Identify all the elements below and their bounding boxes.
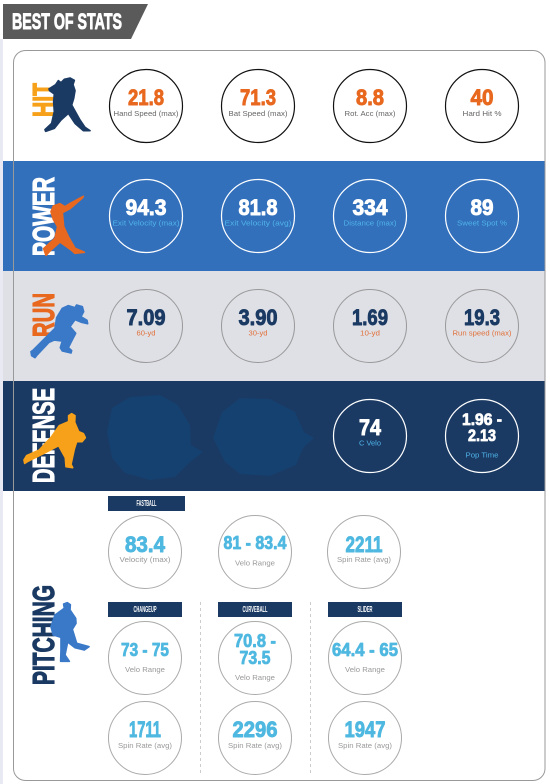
stat: slider spin rate — [328, 702, 402, 774]
stat: 30 yard: 30-yd — [248, 328, 268, 338]
stat: fastball velo range — [218, 516, 292, 588]
stat: distance: Distance (max) — [344, 218, 397, 228]
header: slider — [328, 602, 402, 617]
heading: power: POWER — [27, 177, 61, 256]
stat: rotational acceleration: Rot. Acc (max) — [344, 109, 396, 118]
stat: exit velocity max: 94.3 — [126, 195, 166, 220]
stat: changeup spin rate: 1711 — [129, 717, 161, 742]
stat: sweet spot: Sweet Spot % — [457, 218, 507, 228]
stat: fastball spin rate — [328, 516, 400, 588]
stat: fastball velo range: 81 - 83.4 — [224, 532, 287, 553]
stat: 30 yard: 3.90 — [238, 305, 278, 330]
stat: bat speed — [222, 70, 294, 142]
stat: changeup velo range — [108, 622, 182, 694]
stat: fastball velo range: Velo Range — [235, 558, 275, 568]
panel: defense — [3, 381, 545, 491]
stat: rotational acceleration — [334, 70, 406, 142]
stat: fastball velocity — [108, 516, 182, 588]
stat: changeup velo range: Velo Range — [125, 665, 165, 674]
panel: pitching — [27, 496, 402, 775]
stat: slider velo range: Velo Range — [345, 665, 385, 674]
stat: curveball spin rate: 2296 — [232, 717, 278, 742]
stat: rotational acceleration: 8.8 — [356, 85, 384, 110]
stat: slider spin rate: 1947 — [344, 717, 386, 742]
stat: 10 yard: 1.69 — [352, 305, 388, 330]
stat: fastball spin rate: Spin Rate (avg) — [337, 555, 392, 564]
icon: fielder — [24, 414, 85, 468]
heading: pitching: PITCHING — [27, 585, 61, 685]
stat: curveball spin rate: Spin Rate (avg) — [228, 741, 283, 750]
stat: pop time: Pop Time — [466, 450, 498, 460]
heading: run: RUN — [27, 293, 61, 337]
stat: 60 yard: 60-yd — [136, 328, 156, 338]
stat: changeup spin rate — [108, 702, 182, 774]
title banner — [3, 4, 148, 39]
stat: hard hit — [446, 70, 518, 142]
stat: 10 yard — [334, 290, 406, 362]
stat: hard hit: 40 — [470, 85, 494, 110]
stat: distance: 334 — [352, 195, 388, 220]
icon: faded blob left — [107, 395, 203, 480]
stat: slider velo range — [328, 622, 402, 694]
header: curveball: CURVEBALL — [242, 605, 268, 614]
header: changeup — [108, 602, 182, 617]
stat: catcher velocity: C Velo — [359, 438, 381, 448]
stat: curveball spin rate — [218, 702, 292, 774]
stat: exit velocity avg: 81.8 — [238, 195, 278, 220]
stat: distance — [334, 180, 406, 252]
stat: exit velocity max — [110, 180, 182, 252]
stat: sweet spot: 89 — [470, 195, 494, 220]
icon: faded blob right — [213, 398, 314, 476]
stat: pop time — [446, 400, 518, 472]
stat: sweet spot — [446, 180, 518, 252]
stat: slider velo range: 64.4 - 65 — [332, 639, 398, 660]
stat: curveball velo range — [218, 622, 292, 694]
stat: 60 yard — [110, 290, 182, 362]
stat: fastball velocity: Velocity (max) — [120, 555, 171, 564]
stat: fastball spin rate: 2211 — [346, 532, 382, 557]
stat: hand speed — [110, 70, 182, 142]
stat: run speed: 19.3 — [464, 305, 500, 330]
stat: pop time: 1.96 - — [462, 410, 502, 429]
stat: catcher velocity — [334, 400, 406, 472]
stat: run speed — [446, 290, 518, 362]
stat: catcher velocity: 74 — [359, 415, 381, 440]
panel: power — [3, 161, 545, 271]
header: slider: SLIDER — [358, 605, 373, 614]
stat: exit velocity avg: Exit Velocity (avg) — [224, 218, 292, 228]
stat: 30 yard — [222, 290, 294, 362]
stat: slider spin rate: Spin Rate (avg) — [338, 741, 393, 750]
stat: bat speed: Bat Speed (max) — [228, 109, 288, 118]
stat: 10 yard: 10-yd — [360, 328, 380, 338]
header: fastball — [108, 496, 185, 511]
stat: curveball velo range: 70.8 - — [234, 630, 276, 651]
icon: power hitter — [44, 196, 84, 255]
heading: defense: DEFENSE — [27, 388, 61, 483]
stat: exit velocity max: Exit Velocity (max) — [112, 218, 180, 228]
title banner: BEST OF STATS — [12, 9, 122, 34]
stat: pop time: 2.13 — [468, 426, 496, 445]
icon: runner — [31, 305, 88, 358]
header: curveball — [218, 602, 292, 617]
header: changeup: CHANGEUP — [134, 605, 157, 614]
stat: changeup spin rate: Spin Rate (avg) — [118, 741, 173, 750]
stat: fastball velocity: 83.4 — [125, 532, 165, 557]
stat: changeup velo range: 73 - 75 — [121, 639, 169, 660]
stat: hand speed: 21.8 — [128, 85, 164, 110]
icon: pitcher — [51, 603, 89, 661]
stat: 60 yard: 7.09 — [126, 305, 166, 330]
stat: exit velocity avg — [222, 180, 294, 252]
stat: curveball velo range: 73.5 — [240, 647, 270, 668]
stat: hard hit: Hard Hit % — [462, 109, 502, 118]
heading: hit: HIT — [27, 83, 61, 117]
panel: run — [3, 271, 545, 381]
stat: hand speed: Hand Speed (max) — [114, 109, 179, 118]
stat: curveball velo range: Velo Range — [235, 673, 275, 682]
header: fastball: FASTBALL — [136, 499, 157, 508]
icon: batter — [45, 78, 90, 131]
panel: hit — [14, 51, 545, 161]
stat: bat speed: 71.3 — [240, 85, 276, 110]
stat: run speed: Run speed (max) — [452, 328, 512, 338]
